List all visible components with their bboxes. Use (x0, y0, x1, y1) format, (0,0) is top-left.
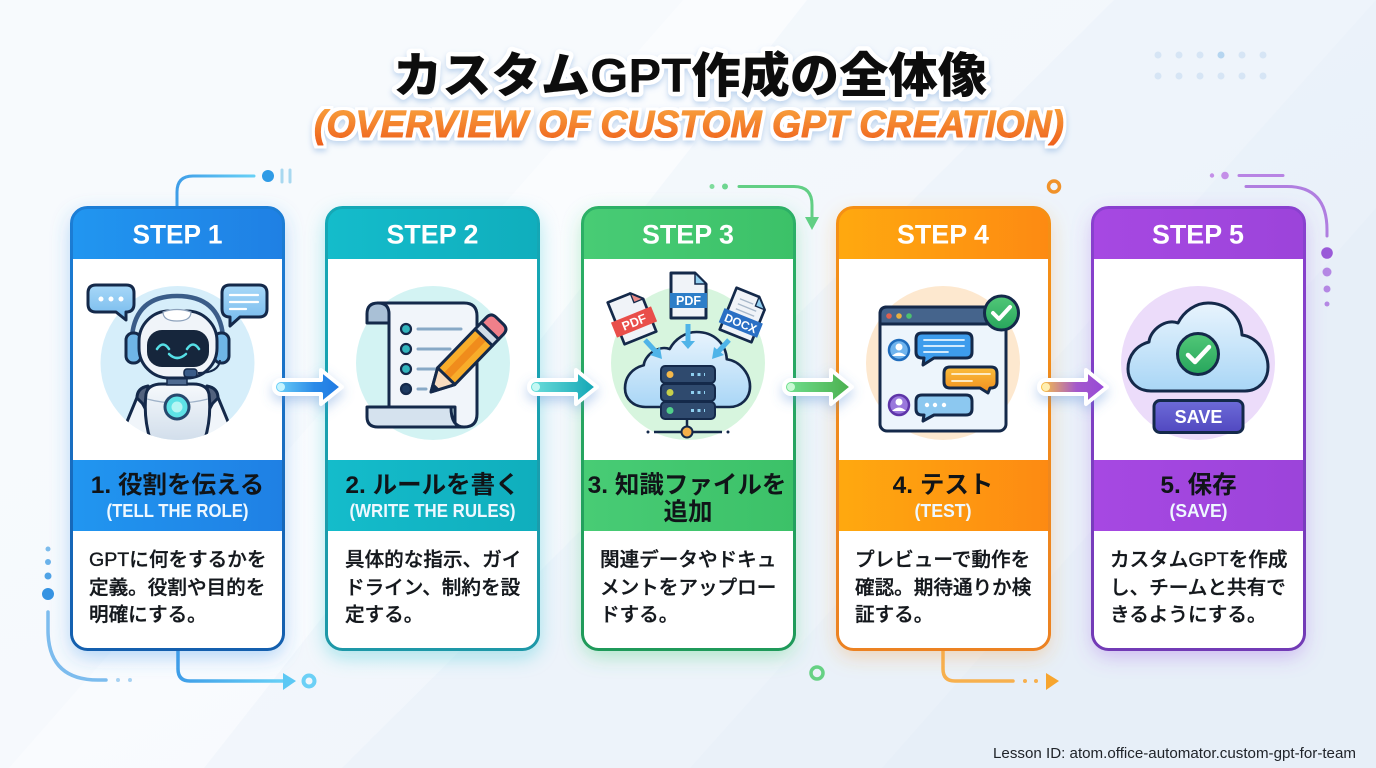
green connector and ring (710, 184, 823, 679)
arrow: step 2 to 3 (529, 370, 597, 404)
icon: document and pencil (356, 286, 510, 440)
description: 具体的な指示、ガイ (345, 549, 521, 571)
step label: STEP 5 (1152, 220, 1244, 250)
description: 定義。役割や目的を (89, 577, 265, 599)
arrow: step 1 to 2 (274, 370, 342, 404)
description: 明確にする。 (89, 604, 207, 626)
decorative dot grid (1154, 52, 1266, 80)
lesson id footer: Lesson ID: atom.office-automator.custom-gpt-for-team (993, 746, 1356, 762)
english label: (SAVE) (1170, 501, 1228, 521)
description: ドする。 (600, 604, 678, 626)
icon: cloud save (1121, 286, 1275, 440)
purple connector and dots (1210, 172, 1333, 306)
english label: (TEST) (914, 501, 972, 521)
subtitle: (OVERVIEW OF CUSTOM GPT CREATION) (314, 104, 1064, 146)
panel: step 5 (1092, 208, 1304, 650)
icon: files uploading to cloud server: PDF (676, 294, 701, 308)
panel: step 3 (582, 208, 794, 650)
description: ドライン、制約を設 (345, 577, 521, 599)
step label: STEP 3 (642, 220, 734, 250)
icon: robot with speech bubbles (88, 285, 267, 446)
description: きるようにする。 (1110, 604, 1267, 626)
description: 関連データやドキュ (600, 548, 776, 571)
orange connector and ring (943, 181, 1060, 690)
heading: 5. 保存 (1160, 471, 1237, 499)
heading: 4. テスト (893, 472, 993, 499)
heading second line: 追加 (664, 498, 712, 526)
heading: 2. ルールを書く (345, 471, 520, 499)
english label: (WRITE THE RULES) (350, 501, 516, 521)
description: 定する。 (345, 604, 423, 626)
english label: (TELL THE ROLE) (106, 501, 248, 521)
description: カスタムGPTを作成 (1110, 549, 1287, 571)
blue connectors and dots (42, 170, 314, 690)
icon: files uploading to cloud server (604, 273, 772, 440)
panel: step 1 (72, 208, 284, 650)
icon: files uploading to cloud server: DOCX (722, 312, 759, 336)
heading: 1. 役割を伝える (91, 471, 264, 499)
step label: STEP 1 (132, 220, 222, 250)
panel: step 2 (326, 208, 538, 650)
description: 証する。 (855, 604, 933, 626)
icon: cloud save: SAVE (1175, 407, 1222, 427)
icon: chat test window (866, 286, 1020, 440)
panel: step 4 (838, 208, 1050, 650)
step label: STEP 2 (386, 220, 478, 250)
description: 確認。期待通りか検 (855, 577, 1032, 599)
description: メントをアップロー (600, 577, 776, 599)
arrow: step 3 to 4 (784, 370, 852, 404)
description: プレビューで動作を (855, 549, 1030, 571)
description: し、チームと共有で (1110, 577, 1286, 599)
arrow: step 4 to 5 (1039, 370, 1107, 404)
description: GPTに何をするかを (89, 549, 266, 571)
icon: files uploading to cloud server: PDF (620, 311, 649, 334)
step label: STEP 4 (897, 220, 989, 250)
heading: 3. 知識ファイルを (588, 471, 786, 499)
title: カスタムGPT作成の全体像 (393, 49, 987, 103)
